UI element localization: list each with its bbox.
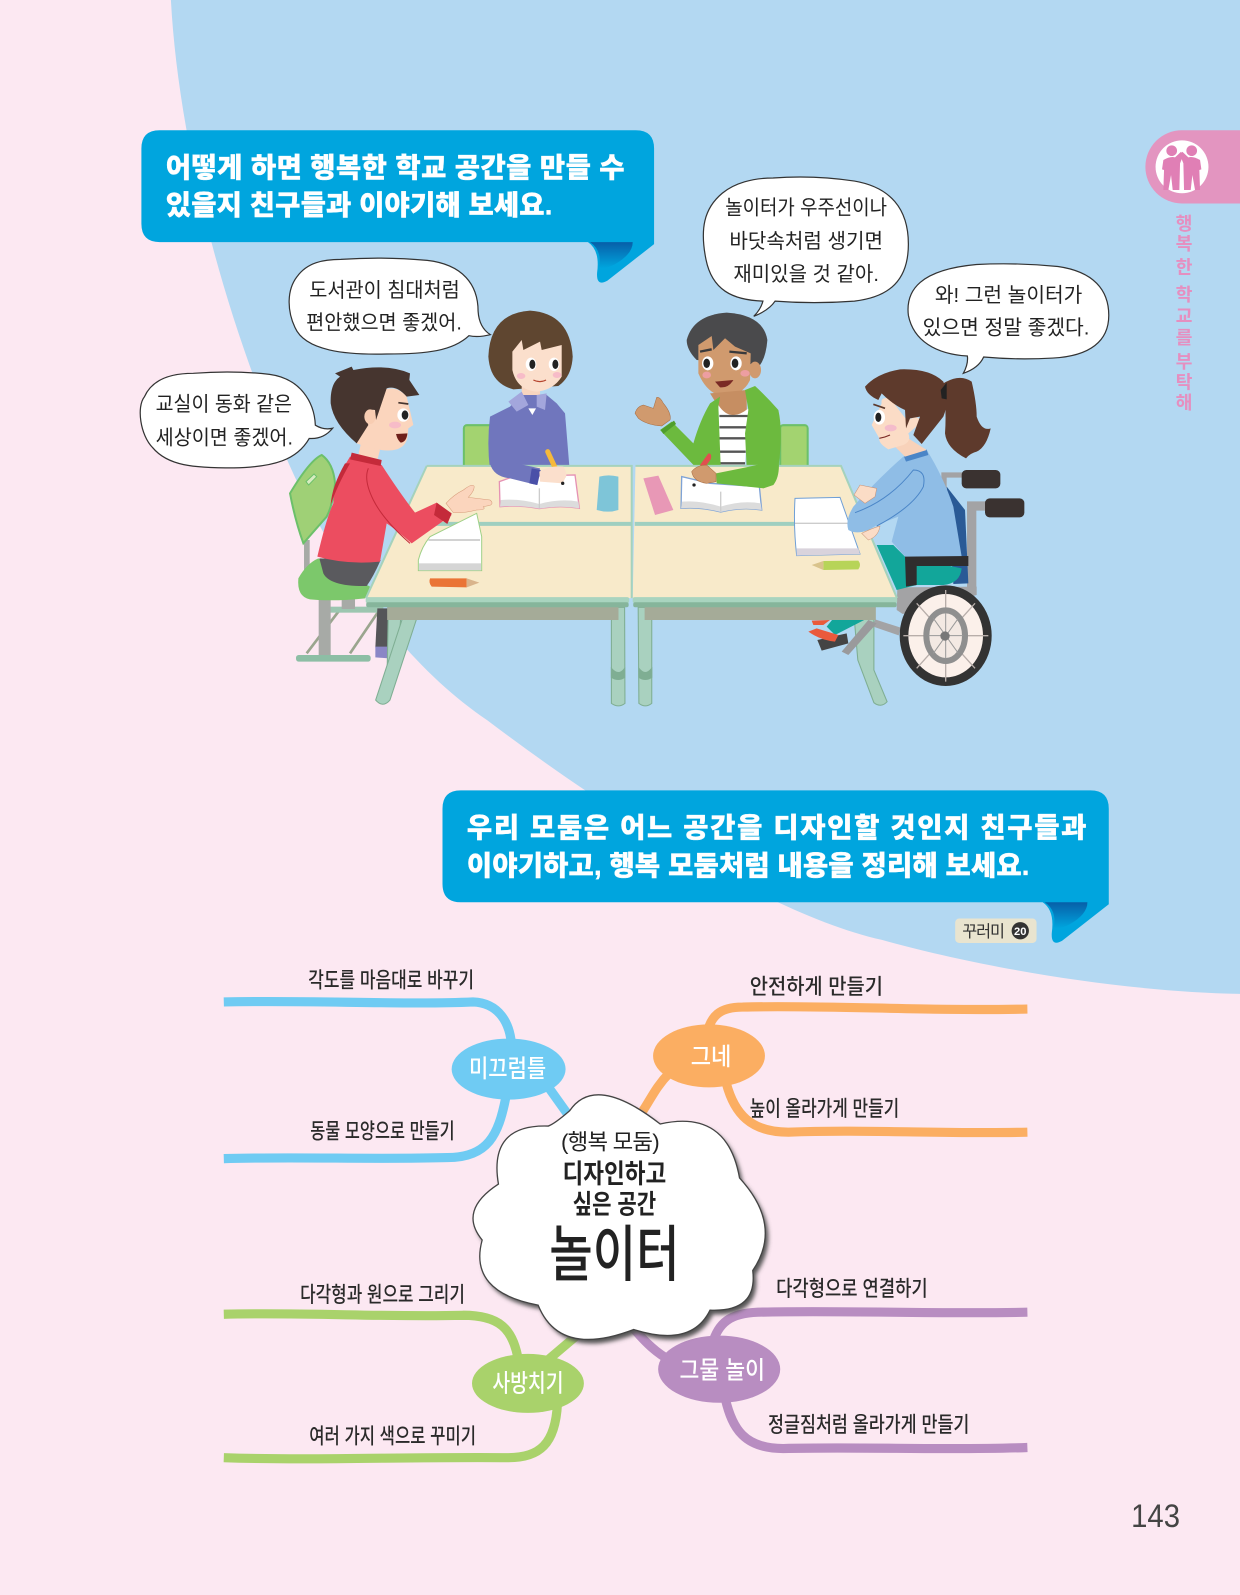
pink open book [499,475,579,509]
speech bubble: playground idea: 바닷속처럼 생기면 [729,230,883,253]
mind map branch: net play: 다각형으로 연결하기 [776,1277,928,1301]
mind map branch: slide: 동물 모양으로 만들기 [310,1119,455,1143]
closed book [418,513,482,571]
callout: group instruction [442,790,1109,943]
mind map branch: slide: 미끄럼틀 [469,1056,546,1083]
mind map branch: hopscotch [224,1283,584,1459]
illustration: items on right desk [794,497,860,570]
speech bubble: library: 도서관이 침대처럼 [309,279,460,302]
speech bubble: playground idea: 재미있을 것 같아. [733,263,879,286]
callout: group instruction: 이야기하고, 행복 모둠처럼 내용을 정리해 보세요. [467,850,1029,881]
illustration: wheelchair frame [808,470,1024,655]
speech bubble: library: 편안했으면 좋겠어. [306,312,462,335]
central cloud [473,1095,768,1344]
callout: top question: 어떻게 하면 행복한 학교 공간을 만들 수 [166,152,625,183]
central cloud: 놀이터 [549,1221,680,1289]
illustration: girl with short hair [488,311,573,470]
mind map branch: net play [633,1277,1027,1449]
illustration: desk legs [376,607,887,706]
speech bubble: classroom: 세상이면 좋겠어. [156,427,293,450]
illustration: back chairs [464,425,808,468]
callout: top question: 있을지 친구들과 이야기해 보세요. [166,190,552,221]
tag: workbook reference [955,919,1037,943]
speech bubble: library [289,258,490,354]
mind map branch: slide: 각도를 마음대로 바꾸기 [308,969,474,993]
callout: top question [141,130,654,283]
mind map branch: swing: 그네 [691,1044,731,1071]
tag: workbook reference: 20 [1014,926,1026,938]
illustration: girl writing arm [490,452,566,485]
speech bubble: agreement [908,264,1109,373]
speech bubble: agreement: 있으면 정말 좋겠다. [923,317,1089,340]
illustration: desks [366,466,897,620]
illustration: blue pencil case [597,475,618,512]
open white book [794,497,860,556]
illustration: boy in red sweater [317,367,492,587]
page number: 143 [1131,1498,1180,1534]
illustration: girl in wheelchair [847,369,991,590]
green pencil [812,561,860,570]
speech bubble: playground idea: 놀이터가 우주선이나 [725,197,887,220]
central cloud: 디자인하고 [563,1159,666,1189]
mind map branch: net play: 그물 놀이 [680,1357,765,1384]
mind map branch: hopscotch: 여러 가지 색으로 꾸미기 [309,1424,476,1448]
orange pencil [429,578,479,587]
speech bubble: playground idea [703,177,908,316]
illustration: boy chair and leg [290,455,389,662]
mind map branch: hopscotch: 다각형과 원으로 그리기 [300,1283,465,1307]
mind map branch: slide [224,969,570,1159]
mind map branch: hopscotch: 사방치기 [492,1371,564,1398]
blue background shape [171,0,1240,994]
mind map branch: swing: 높이 올라가게 만들기 [750,1097,899,1121]
central cloud: (행복 모둠) [561,1129,660,1154]
side tab: chapter icon [1145,130,1240,203]
illustration: boy in green jacket [635,313,781,468]
illustration: wheelchair wheel [903,590,988,682]
illustration: pink pencil case [643,476,673,515]
mind map branch: swing [643,975,1027,1133]
central cloud: 싶은 공간 [573,1190,656,1220]
callout: group instruction: 우리 모둠은 어느 공간을 디자인할 것인지 친구들과 [467,812,1086,843]
illustration: items on left desks [499,475,579,509]
speech bubble: classroom: 교실이 동화 같은 [156,393,292,416]
tag: workbook reference: 꾸러미 [962,923,1005,941]
speech bubble: classroom [140,372,333,468]
illustration: boy writing arm [692,453,779,488]
side tab: vertical chapter title: 행복한 학교를 부탁해 [1176,213,1193,413]
speech bubble: agreement: 와! 그런 놀이터가 [935,284,1083,307]
illustration: blue open book [681,477,762,512]
mind map branch: swing: 안전하게 만들기 [750,975,883,999]
mind map branch: net play: 정글짐처럼 올라가게 만들기 [768,1413,969,1437]
